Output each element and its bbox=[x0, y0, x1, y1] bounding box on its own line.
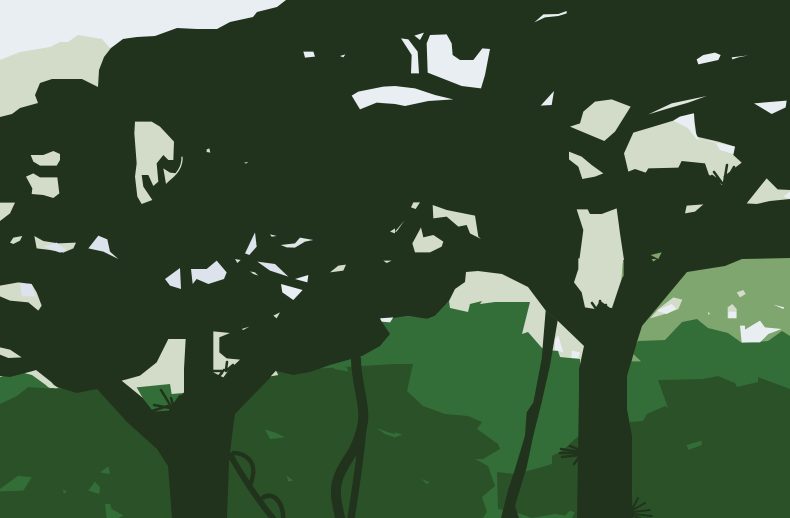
epiphyte: fern on right trunk fork bbox=[592, 301, 612, 314]
epiphyte: fern on trunk side bbox=[560, 446, 580, 464]
green highlights inside foreground foliage bbox=[0, 366, 395, 518]
openings in the far background bbox=[555, 290, 784, 361]
epiphyte: fern upper right branch bbox=[712, 165, 734, 183]
epiphyte: fern at trunk base bbox=[633, 498, 652, 518]
vine: long vine by right trunk bbox=[501, 311, 558, 518]
vines: twisting lianas left bbox=[231, 359, 363, 518]
epiphyte: fern on left trunk fork bbox=[152, 390, 180, 411]
canopy gaps upper left bbox=[0, 52, 395, 259]
light green distant slope bbox=[618, 256, 790, 376]
epiphyte: fern between trunk and branch bbox=[213, 362, 233, 379]
canopy gaps lower left bbox=[0, 259, 393, 412]
mid green forest layer bbox=[0, 301, 790, 518]
canopy gap above right trunk fork bbox=[574, 258, 657, 309]
dark green foreground foliage bbox=[0, 364, 790, 518]
canopy gaps upper right bbox=[395, 11, 790, 260]
green highlights right foliage bbox=[395, 432, 702, 518]
